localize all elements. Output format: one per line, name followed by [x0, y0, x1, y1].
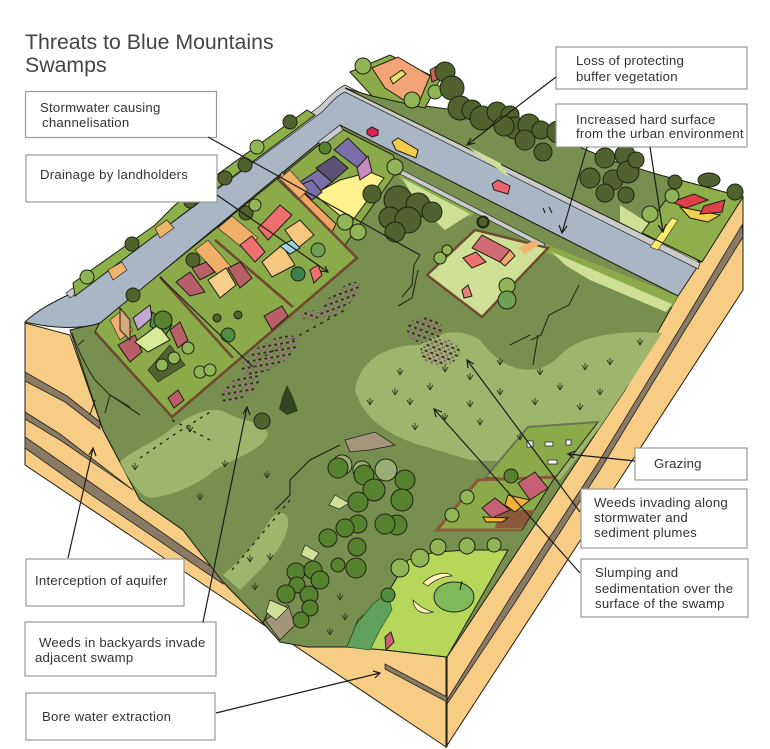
big dark tree clump in centre — [379, 159, 488, 242]
callout: Slumping and sedimentation — [581, 559, 748, 617]
callout: Bore water extraction: Bore water extraction — [42, 709, 171, 724]
soil: right face — [446, 197, 743, 747]
callout: Increased hard surface: from the urban environment — [576, 126, 744, 141]
callout: Weeds invading: Weeds invading along — [594, 495, 728, 510]
title: Swamps — [25, 53, 107, 77]
callout: Interception of aquifer: Interception of aquifer — [35, 573, 168, 588]
arrow: drainage — [217, 195, 328, 272]
hedge strip — [73, 110, 315, 296]
light verge beyond road — [465, 145, 698, 262]
lot walls — [95, 180, 357, 417]
arrow: grazing — [568, 451, 635, 461]
road — [25, 87, 698, 327]
callout: Stormwater causing channelisation: Stormwater causing — [40, 100, 160, 115]
arrow: buffer vegetation — [467, 77, 556, 145]
sediment plume: lower — [223, 513, 288, 590]
callout: Interception of aquifer — [26, 559, 184, 606]
callout: Slumping and sedimentation: sedimentation over the — [595, 581, 733, 596]
callout: Grazing — [635, 448, 747, 480]
callout: Loss of protecting buffer vegetation — [556, 47, 747, 89]
top lot with purple house — [278, 138, 384, 240]
callout: Grazing: Grazing — [654, 456, 702, 471]
golf course — [347, 538, 508, 657]
title — [25, 30, 274, 77]
callout: Increased hard surface: Increased hard surface — [576, 112, 716, 127]
arrow: slumping — [434, 409, 580, 573]
houses — [118, 335, 142, 362]
back house — [350, 55, 445, 108]
grazing animals — [527, 440, 571, 464]
callout: Slumping and sedimentation: Slumping and — [595, 565, 678, 580]
callout: Weeds in backyards: Weeds in backyards invade — [39, 635, 206, 650]
vehicles — [367, 127, 552, 213]
callout: Loss of protecting buffer vegetation: buffer vegetation — [576, 69, 678, 84]
arrow: hard surface left — [559, 147, 587, 233]
tree ferns — [266, 495, 349, 620]
callout: Bore water extraction — [26, 693, 215, 740]
arrow: weeds plumes — [467, 360, 580, 512]
callout: Weeds in backyards: adjacent swamp — [35, 650, 133, 665]
house lots — [95, 170, 357, 417]
arrow: bore water — [216, 671, 380, 713]
swamp surface — [70, 125, 678, 657]
orange driveways — [110, 170, 308, 340]
callout: Weeds invading: sediment plumes — [594, 525, 697, 540]
callout: Slumping and sedimentation: surface of the swamp — [595, 596, 725, 611]
grass tufts — [132, 338, 643, 635]
title: Threats to Blue Mountains — [25, 30, 274, 54]
soil: left face — [25, 323, 446, 747]
light bank along road — [402, 178, 672, 312]
arrow: aquifer — [68, 448, 96, 558]
green band beside road — [398, 172, 678, 307]
slump banks — [265, 432, 395, 640]
arrow: weeds from lot — [160, 277, 253, 367]
right-hand lot with red roof — [642, 173, 743, 262]
arrow: stormwater — [208, 137, 420, 255]
callout: Weeds invading: stormwater and — [594, 510, 688, 525]
callout: Drainage by landholders — [26, 155, 217, 202]
mid lot — [427, 216, 548, 317]
arrow: backyard weeds — [203, 407, 250, 622]
callout: Stormwater causing channelisation: channelisation — [42, 115, 129, 130]
callout: Increased hard surface — [556, 104, 747, 147]
strip trees — [80, 115, 297, 284]
weed patches — [216, 276, 460, 408]
callout: Weeds invading — [581, 489, 747, 548]
sediment plume: lower left — [120, 410, 268, 498]
swamp forest — [254, 385, 415, 628]
erosion gullies — [72, 255, 579, 415]
driveway patches on strip — [108, 220, 174, 280]
callout: Loss of protecting buffer vegetation: Loss of protecting — [576, 53, 684, 68]
callout: Stormwater causing channelisation — [26, 92, 216, 138]
pavement strips — [66, 85, 700, 298]
lot block lawn — [95, 128, 398, 417]
dashed stormwater marks — [140, 310, 345, 570]
sediment plume: upper — [355, 332, 662, 480]
buffer trees beyond road — [435, 62, 644, 203]
callout: Weeds in backyards — [25, 622, 216, 676]
lot trees — [126, 288, 140, 302]
arrow: hard surface right — [650, 147, 666, 232]
callout: Drainage by landholders: Drainage by landholders — [40, 167, 188, 182]
lower-right lot — [437, 422, 598, 530]
rock strata — [25, 225, 743, 747]
back land beyond road — [345, 88, 743, 262]
